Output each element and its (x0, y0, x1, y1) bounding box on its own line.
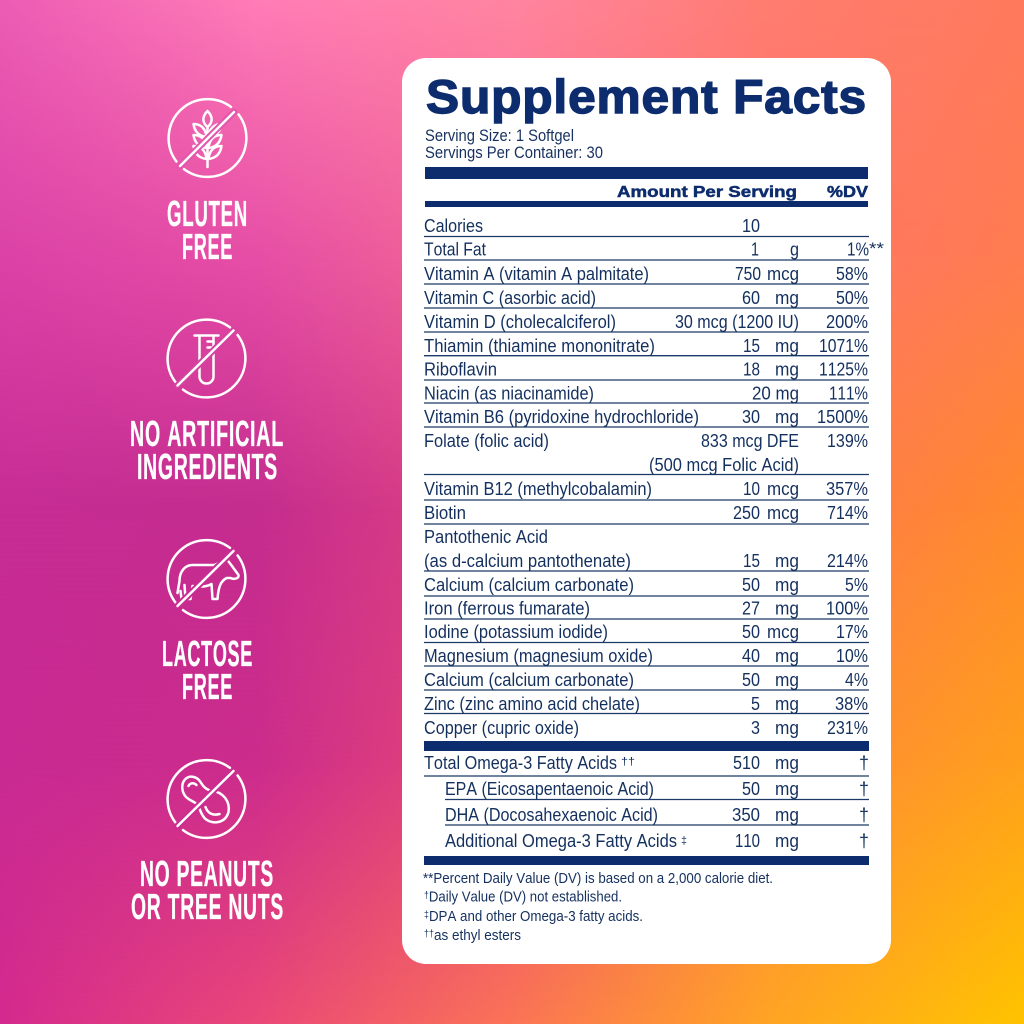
row: dha: DHA (Docosahexaenoic Acid) (445, 805, 658, 825)
row: total omega-3: mg (775, 753, 799, 773)
row: calcium second entry: 4% (845, 670, 868, 690)
row: iodine: 17% (836, 622, 868, 642)
label: no artificial ingredients (130, 413, 284, 487)
row: total omega-3: † (859, 753, 869, 773)
label: no artificial ingredients: NO ARTIFICIAL (130, 413, 284, 454)
badge: no artificial ingredients (130, 320, 284, 487)
footnotes: DPA and other Omega-3 fatty acids. (429, 908, 643, 925)
row: zinc: 38% (835, 694, 868, 714)
row: vitamin b6: mg (775, 407, 799, 427)
serving info: Servings Per Container: 30 (425, 144, 603, 162)
row: additional omega-3: ‡ (681, 835, 687, 847)
row: pantothenic acid: mg (775, 551, 799, 571)
footnotes: Daily Value (DV) not established. (429, 888, 622, 906)
row: epa: EPA (Eicosapentaenoic Acid) (445, 779, 654, 799)
label: no artificial ingredients: INGREDIENTS (137, 446, 278, 487)
row: copper: 3 (751, 718, 760, 738)
row: total fat (424, 240, 885, 260)
row: total omega-3: †† (621, 756, 635, 768)
footnotes: † (424, 890, 429, 902)
row: biotin (424, 503, 868, 523)
footnotes: as ethyl esters (434, 927, 521, 944)
icon: crossed-out cow (168, 540, 245, 618)
row: vitamin a: 750 (735, 264, 761, 284)
row: niacin: 111% (829, 384, 868, 404)
serving info: Serving Size: 1 Softgel (425, 127, 574, 145)
footnotes (423, 870, 773, 944)
row: epa: mg (775, 779, 799, 799)
row: additional omega-3: mg (775, 831, 799, 851)
row: vitamin c: 60 (742, 288, 760, 308)
icon: crossed-out test tube (168, 320, 245, 397)
row: vitamin c: mg (775, 288, 799, 308)
row: riboflavin: mg (775, 360, 799, 380)
row: copper: mg (775, 718, 799, 738)
row: vitamin b6: Vitamin B6 (pyridoxine hydrochloride) (424, 407, 699, 427)
row: vitamin a (424, 264, 868, 284)
footnotes: †† (424, 929, 434, 940)
row: zinc: mg (775, 694, 799, 714)
table header: %DV (827, 184, 868, 201)
row: calories (424, 216, 760, 236)
label: lactose free: FREE (182, 666, 233, 707)
row: pantothenic acid: 15 (743, 551, 760, 571)
row: iron: mg (775, 598, 799, 618)
row: total fat: 1 (751, 240, 759, 260)
row: copper (424, 718, 868, 738)
row: folate: Folate (folic acid) (424, 431, 549, 451)
row: vitamin d: Vitamin D (cholecalciferol) (424, 312, 616, 332)
row: zinc: 5 (751, 694, 760, 714)
row: pantothenic acid: 214% (827, 551, 868, 571)
row: vitamin b12: mcg (767, 479, 799, 499)
row: iron (424, 598, 868, 618)
row: folate: (500 mcg Folic Acid) (649, 455, 799, 475)
row: vitamin c: 50% (836, 288, 868, 308)
row: epa: 50 (742, 779, 760, 799)
row: vitamin b12: 357% (826, 479, 868, 499)
row: biotin: mcg (767, 503, 799, 523)
row: total fat: ** (869, 240, 885, 258)
row: additional omega-3: 110 (735, 831, 760, 851)
panel background (402, 58, 891, 964)
row: total fat: g (790, 240, 799, 260)
row: vitamin d (424, 312, 868, 332)
row: niacin: Niacin (as niacinamide) (424, 384, 594, 404)
row: thiamin: 1071% (819, 336, 868, 356)
row: vitamin d: 200% (826, 312, 868, 332)
row: vitamin c: Vitamin C (asorbic acid) (424, 288, 596, 308)
row: pantothenic acid: Pantothenic Acid (424, 527, 548, 547)
badge: lactose free (162, 540, 253, 707)
footnotes: ‡ (424, 910, 429, 921)
row: iron: 27 (742, 598, 760, 618)
row: vitamin b6: 1500% (817, 407, 868, 427)
row: thiamin: mg (775, 336, 799, 356)
row: vitamin b6 (424, 407, 868, 427)
row: vitamin b12: 10 (743, 479, 760, 499)
row: pantothenic acid (424, 527, 868, 571)
row: zinc: Zinc (zinc amino acid chelate) (424, 694, 640, 714)
row: riboflavin: 18 (743, 360, 760, 380)
row: vitamin b12: Vitamin B12 (methylcobalamin) (424, 479, 652, 499)
row: iodine: 50 (742, 622, 760, 642)
row: total omega-3: 510 (733, 753, 760, 773)
label: no peanuts or tree nuts: NO PEANUTS (140, 853, 274, 894)
row: dha: † (859, 805, 869, 825)
row: magnesium: 40 (742, 646, 760, 666)
label: gluten free: GLUTEN (167, 193, 248, 234)
row: iron: 100% (826, 598, 868, 618)
row: zinc (424, 694, 868, 714)
omega-3 section (424, 741, 869, 865)
row: iron: Iron (ferrous fumarate) (424, 598, 590, 618)
row: magnesium (424, 646, 868, 666)
label: lactose free: LACTOSE (162, 633, 253, 674)
badge: gluten free (167, 99, 248, 267)
panel: supplement facts (402, 58, 891, 964)
row: thiamin: Thiamin (thiamine mononitrate) (424, 336, 655, 356)
table header (425, 167, 868, 207)
row: calcium second entry: Calcium (calcium carbonate) (424, 670, 634, 690)
row: dha: mg (775, 805, 799, 825)
row: additional omega-3: Additional Omega-3 Fatty Acids (445, 831, 677, 851)
row: riboflavin (424, 360, 868, 380)
row: vitamin a: Vitamin A (vitamin A palmitate) (424, 264, 649, 284)
row: total omega-3: Total Omega-3 Fatty Acids (424, 753, 617, 773)
row: niacin (424, 384, 868, 404)
row: iodine: Iodine (potassium iodide) (424, 622, 608, 642)
icon: crossed-out wheat (169, 99, 246, 177)
row: vitamin a: mcg (767, 264, 799, 284)
nutrient table (424, 216, 885, 738)
row: magnesium: mg (775, 646, 799, 666)
row: folate (424, 431, 868, 475)
row: vitamin a: 58% (836, 264, 868, 284)
row: biotin: 250 (733, 503, 760, 523)
label: no peanuts or tree nuts (131, 853, 284, 927)
row: iodine (424, 622, 868, 642)
row: additional omega-3 (445, 831, 869, 851)
title: Supplement Facts (426, 70, 867, 123)
row: epa (445, 779, 869, 799)
row: vitamin c (424, 288, 868, 308)
label: gluten free (167, 193, 248, 267)
label: no peanuts or tree nuts: OR TREE NUTS (131, 886, 284, 927)
badge: no peanuts or tree nuts (131, 760, 284, 927)
row: niacin: 20 mg (752, 384, 799, 404)
icon: crossed-out peanut (168, 760, 245, 838)
row: dha (445, 805, 869, 825)
row: dha: 350 (732, 805, 760, 825)
row: calcium: 50 (742, 575, 760, 595)
serving info (425, 127, 603, 162)
label: gluten free: FREE (182, 226, 233, 267)
row: additional omega-3: † (859, 831, 869, 851)
row: riboflavin: 1125% (819, 360, 868, 380)
label: lactose free (162, 633, 253, 707)
row: vitamin d: 30 mcg (1200 IU) (675, 312, 799, 332)
row: total fat: 1% (847, 240, 869, 260)
footnotes: **Percent Daily Value (DV) is based on a 2,000 calorie diet. (423, 870, 773, 887)
row: folate: 833 mcg DFE (701, 431, 799, 451)
row: epa: † (859, 779, 869, 799)
row: calories: Calories (424, 216, 483, 236)
row: biotin: Biotin (424, 503, 466, 523)
row: copper: Copper (cupric oxide) (424, 718, 579, 738)
row: pantothenic acid: (as d-calcium pantothenate) (424, 551, 631, 571)
row: magnesium: 10% (836, 646, 868, 666)
table header: Amount Per Serving (617, 184, 797, 201)
row: calcium (424, 575, 868, 595)
row: thiamin: 15 (743, 336, 760, 356)
row: calcium: mg (775, 575, 799, 595)
row: vitamin b6: 30 (742, 407, 760, 427)
row: biotin: 714% (827, 503, 868, 523)
row: total fat: Total Fat (424, 240, 486, 260)
row: iodine: mcg (767, 622, 799, 642)
row: calcium: Calcium (calcium carbonate) (424, 575, 634, 595)
row: riboflavin: Riboflavin (424, 360, 497, 380)
row: magnesium: Magnesium (magnesium oxide) (424, 646, 653, 666)
row: copper: 231% (827, 718, 868, 738)
row: total omega-3 (424, 753, 869, 773)
row: folate: 139% (827, 431, 868, 451)
row: calories: 10 (742, 216, 760, 236)
row: calcium second entry (424, 670, 868, 690)
row: calcium: 5% (845, 575, 868, 595)
row: calcium second entry: 50 (742, 670, 760, 690)
row: calcium second entry: mg (775, 670, 799, 690)
row: vitamin b12 (424, 479, 868, 499)
row: thiamin (424, 336, 868, 356)
